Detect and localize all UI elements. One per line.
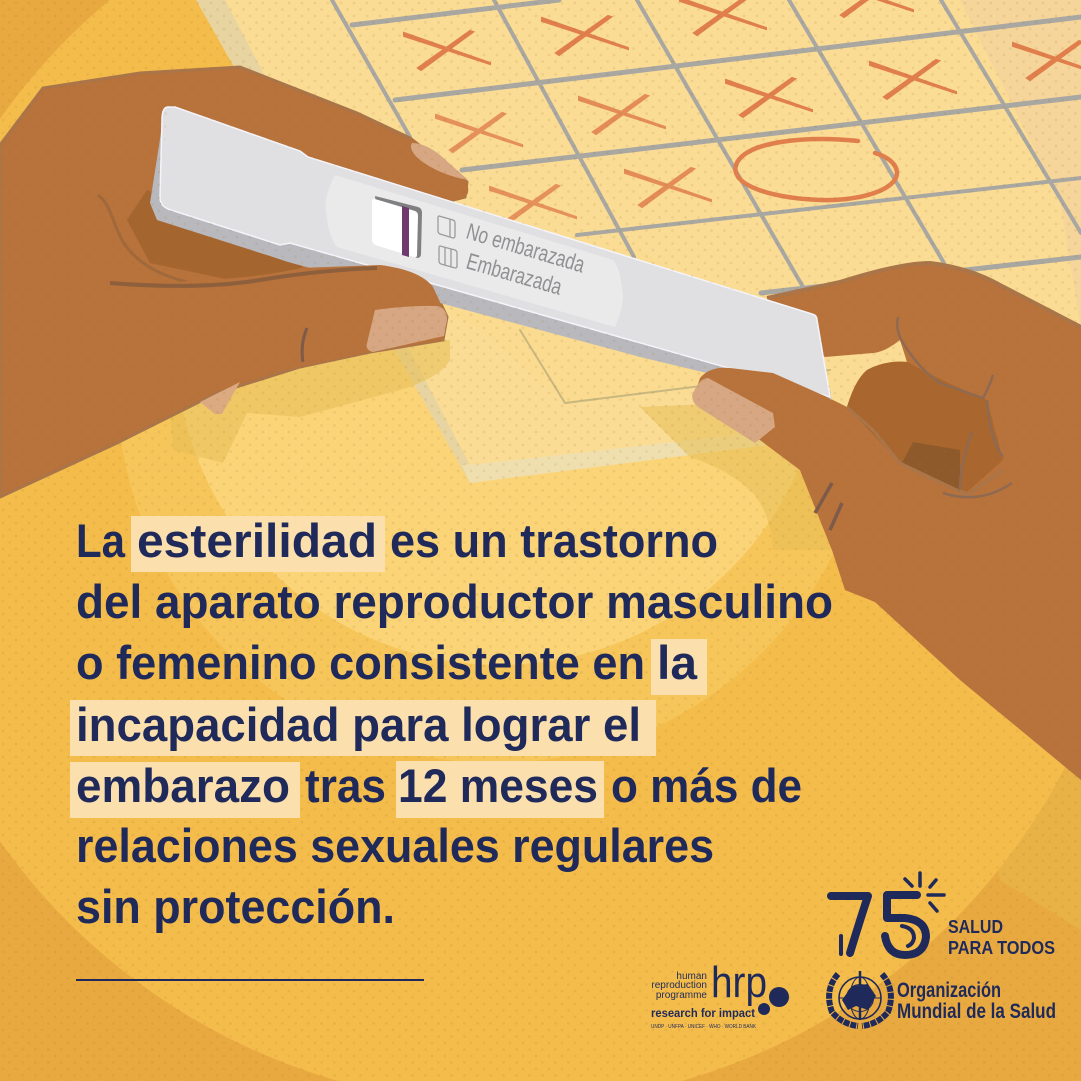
calendar crosses (404, 0, 1081, 224)
statement lines: o femenino consistente en (76, 636, 645, 689)
statement lines: 12 meses (398, 759, 598, 812)
result panel (326, 175, 623, 327)
left fingertip and nail (340, 138, 468, 200)
main text (70, 514, 833, 933)
calendar grid (332, 0, 1081, 403)
HRP logo (651, 958, 789, 1030)
HRP logo: programme (656, 990, 707, 1001)
icon: not pregnant (438, 216, 455, 238)
calendar paper (196, 0, 1081, 483)
statement lines: incapacidad para lograr el (76, 698, 641, 751)
HRP logo: human (676, 971, 707, 982)
icon: pregnant (439, 246, 457, 268)
HRP logo: reproduction (651, 980, 707, 991)
Organización Mundial de la Salud: Organización (897, 979, 1001, 1002)
SALUD PARA TODOS: SALUD (948, 917, 1003, 937)
statement lines: tras (305, 759, 386, 812)
statement lines: la (657, 636, 698, 689)
right hand palm hollow (847, 317, 1012, 497)
HRP logo: research for impact (651, 1008, 755, 1020)
statement lines: embarazo (76, 759, 290, 812)
pregnancy test strip (150, 107, 832, 403)
statement lines: del aparato reproductor masculino (76, 575, 833, 628)
HRP logo: hrp (711, 958, 767, 1007)
statement lines: esterilidad (137, 514, 377, 567)
calendar circled day (735, 139, 897, 200)
statement lines: sin protección. (76, 880, 395, 933)
divider rule (76, 979, 424, 981)
SALUD PARA TODOS: PARA TODOS (948, 938, 1055, 958)
label: Embarazada: Embarazada (464, 248, 565, 300)
Organización Mundial de la Salud (897, 979, 1056, 1023)
label: No embarazada: No embarazada (464, 218, 588, 277)
HRP logo: UNDP · UNFPA · UNICEF · WHO · WORLD BANK (651, 1024, 756, 1030)
left thumb (110, 265, 447, 400)
statement lines: o más de (611, 759, 802, 812)
hand shadows (170, 340, 832, 550)
left hand (0, 67, 467, 497)
highlights (70, 516, 707, 818)
SALUD PARA TODOS (948, 917, 1055, 958)
right thumb and nail (692, 368, 920, 560)
right hand (693, 263, 1081, 780)
statement lines: relaciones sexuales regulares (76, 819, 714, 872)
WHO emblem (829, 971, 891, 1026)
statement lines (76, 514, 833, 933)
statement lines: es un trastorno (390, 514, 718, 567)
result window (372, 196, 422, 258)
statement lines: La (76, 514, 126, 567)
WHO 75 logo (831, 873, 944, 955)
